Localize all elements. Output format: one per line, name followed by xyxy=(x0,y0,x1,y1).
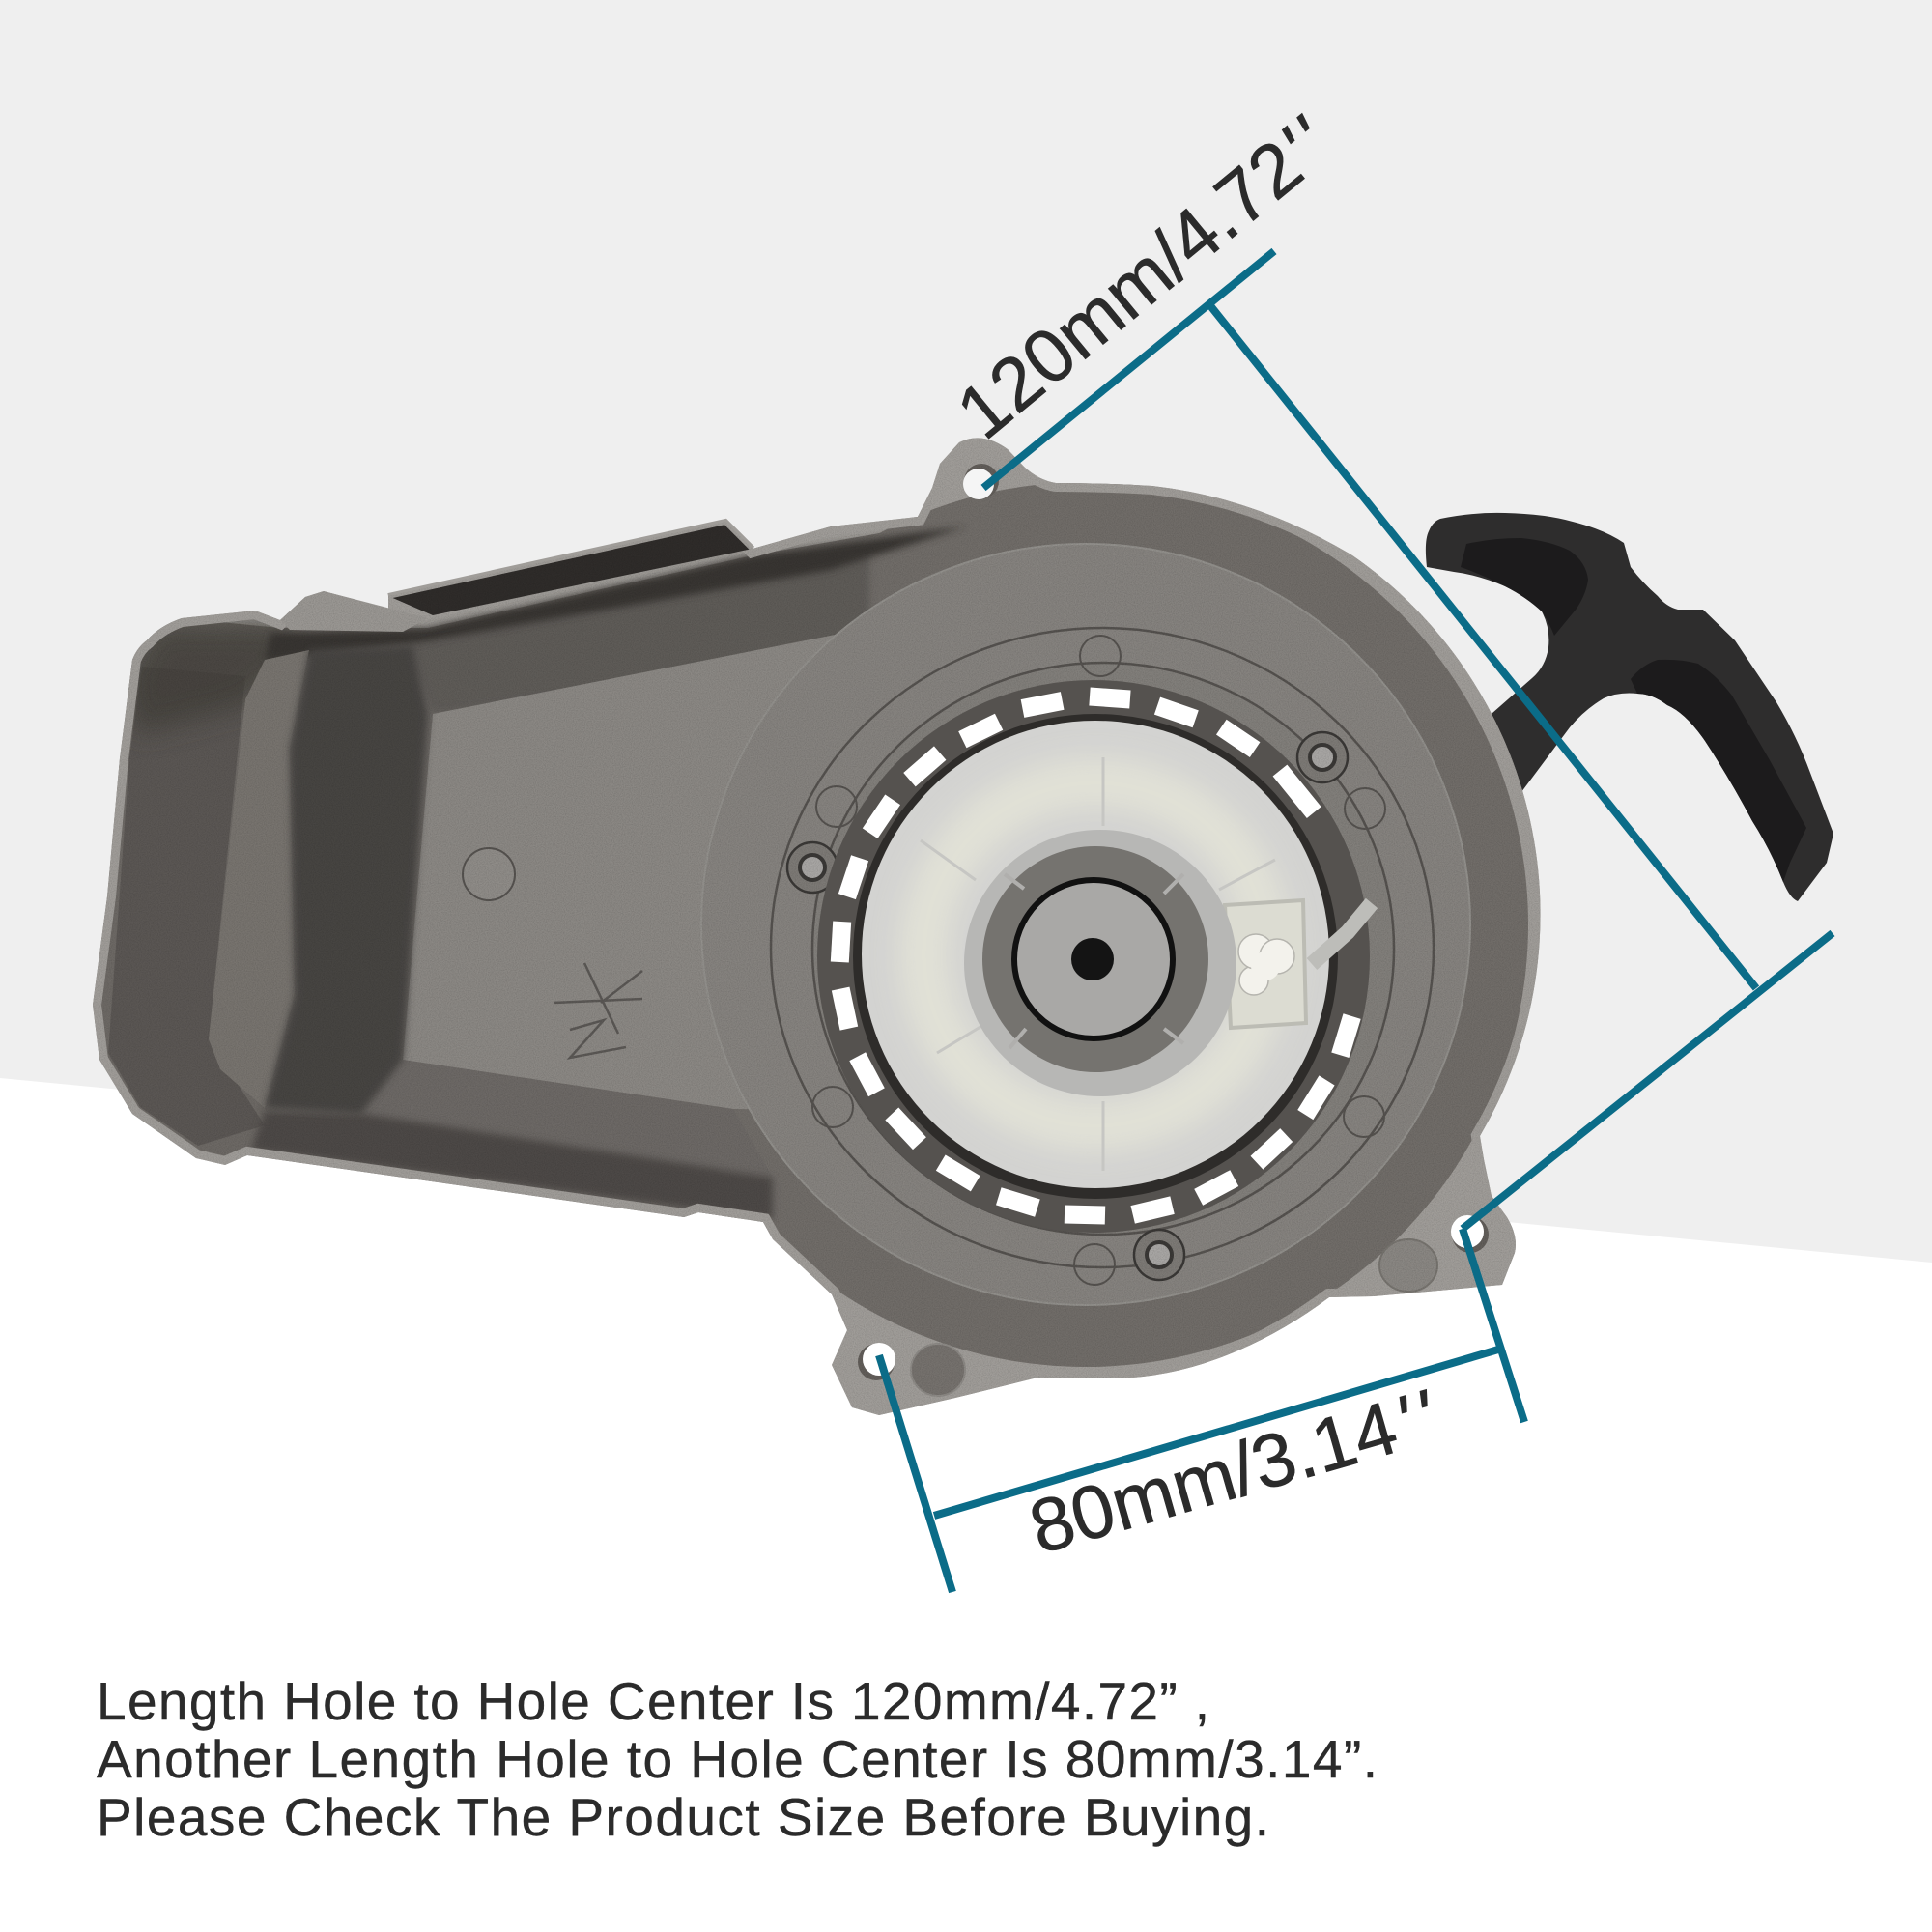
center hub collar xyxy=(964,830,1236,1096)
rim highlight xyxy=(93,438,1541,1415)
tray inner wall xyxy=(93,533,879,1219)
dimension: 80mm extension right xyxy=(1463,1229,1524,1422)
raised slope xyxy=(209,650,309,1108)
flange rim highlight xyxy=(388,522,753,596)
lower floor band xyxy=(624,1093,732,1109)
inner groove ring xyxy=(812,663,1394,1235)
slotted ring xyxy=(817,680,1370,1233)
caption text xyxy=(97,1671,1378,1847)
wheel inner wall xyxy=(757,483,1528,1367)
caption line 2: Another Length Hole to Hole Center Is 80mm/3.14”. xyxy=(97,1729,1378,1789)
pull handle xyxy=(1426,513,1833,901)
top flange xyxy=(388,522,753,615)
black ring xyxy=(1014,880,1173,1038)
caption line 3: Please Check The Product Size Before Buying. xyxy=(97,1787,1269,1847)
dark shadow strip xyxy=(265,645,428,1114)
left tray wall xyxy=(108,667,265,1146)
dimension: 80mm extension left xyxy=(879,1355,952,1592)
main tray floor xyxy=(403,628,869,1111)
starter housing xyxy=(77,435,1555,1420)
lug boss: right xyxy=(1379,1239,1437,1292)
dimension: 80mm measure line xyxy=(934,1350,1498,1516)
starter rope xyxy=(1312,903,1372,964)
top-left wall shading xyxy=(126,623,290,734)
cast ZK logo xyxy=(554,963,642,1058)
product photo: recoil pull starter xyxy=(77,435,1833,1420)
lower tray shadow xyxy=(251,1111,773,1219)
ring boss circles xyxy=(812,636,1385,1285)
housing silhouette with cast rim xyxy=(93,438,1541,1415)
background: upper grey panel xyxy=(0,0,1932,1263)
screws xyxy=(787,732,1348,1280)
side tab xyxy=(280,591,428,632)
upper floor band xyxy=(406,551,869,714)
wheel floor disc xyxy=(701,544,1470,1305)
label: 120mm/4.72: 120mm/4.72'' xyxy=(941,99,1348,455)
rope knot xyxy=(1238,934,1294,995)
dark gap behind fan xyxy=(853,714,1338,1199)
dimension: 120mm extension top xyxy=(983,251,1274,488)
ring windows xyxy=(831,688,1361,1225)
dimension lines xyxy=(879,251,1833,1592)
center bolt xyxy=(1071,938,1114,980)
tray dimple xyxy=(463,848,515,900)
dimension: 120mm extension right xyxy=(1463,933,1833,1229)
grain texture xyxy=(77,435,1555,1420)
hole shadows xyxy=(858,464,1489,1380)
lug boss: bottom xyxy=(911,1344,965,1396)
dimension: 120mm measure line xyxy=(1208,303,1756,988)
mounting holes xyxy=(863,469,1484,1376)
upper tray shadow xyxy=(265,526,966,661)
plastic recoil fan xyxy=(862,721,1329,1188)
hub spokes xyxy=(1005,874,1183,1048)
label: 80mm/3.14: 80mm/3.14'' xyxy=(1020,1372,1450,1570)
rope tab xyxy=(1225,900,1306,1028)
outer groove ring xyxy=(771,628,1434,1267)
caption line 1: Length Hole to Hole Center Is 120mm/4.72” , xyxy=(97,1671,1209,1731)
hub metal xyxy=(982,846,1208,1072)
